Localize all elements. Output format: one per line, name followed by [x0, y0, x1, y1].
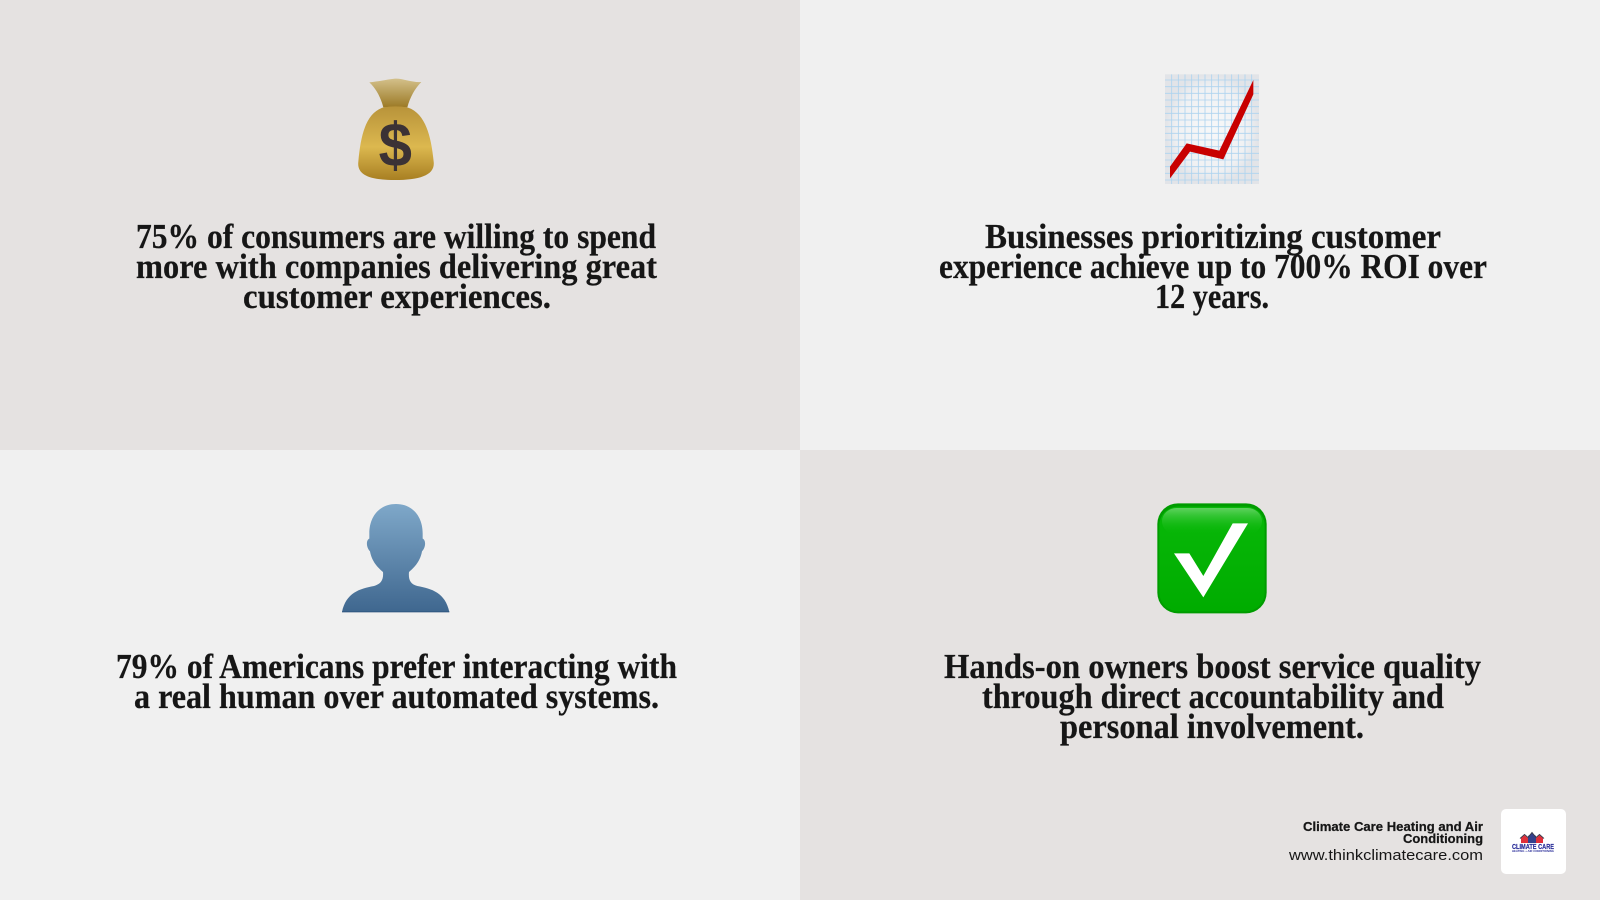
heading: human interaction statistic [116, 647, 677, 716]
heading: ROI statistic [939, 217, 1487, 316]
company name and website [1288, 819, 1483, 864]
icon: rising chart [1165, 74, 1259, 184]
heading: human interaction statistic: a real human over automated systems. [134, 677, 659, 716]
company name and website: Climate Care Heating and Air [1303, 819, 1483, 834]
icon: money bag [358, 79, 434, 181]
company name and website: www.thinkclimatecare.com [1288, 847, 1483, 864]
icon: person silhouette [342, 504, 449, 612]
heading: consumers statistic [136, 217, 657, 316]
icon: green check mark [1157, 503, 1267, 613]
panel: human interaction [0, 450, 800, 900]
heading: hands-on owners statistic: Hands-on owners boost service quality [944, 647, 1481, 686]
heading: hands-on owners statistic [944, 647, 1481, 746]
panel: ROI [800, 0, 1600, 450]
panel: consumers spend more [0, 0, 800, 450]
heading: ROI statistic: experience achieve up to 700% ROI over [939, 247, 1487, 286]
company logo [1501, 809, 1566, 874]
panel: hands-on owners [800, 450, 1600, 900]
icon: money bag: $ [379, 112, 412, 181]
company logo: CLIMATE CARE [1512, 844, 1554, 851]
heading: human interaction statistic: 79% of Americans prefer interacting with [116, 647, 677, 686]
heading: hands-on owners statistic: personal involvement. [1060, 707, 1364, 746]
heading: ROI statistic: 12 years. [1155, 277, 1269, 316]
heading: consumers statistic: 75% of consumers are willing to spend [136, 217, 656, 256]
heading: ROI statistic: Businesses prioritizing customer [985, 217, 1441, 256]
heading: consumers statistic: more with companies delivering great [136, 247, 657, 286]
footer: company branding [1288, 809, 1566, 874]
company logo: HEATING + AIR CONDITIONING [1512, 849, 1555, 853]
company name and website: Conditioning [1403, 831, 1483, 846]
heading: consumers statistic: customer experiences. [243, 277, 551, 316]
heading: hands-on owners statistic: through direct accountability and [982, 677, 1444, 716]
